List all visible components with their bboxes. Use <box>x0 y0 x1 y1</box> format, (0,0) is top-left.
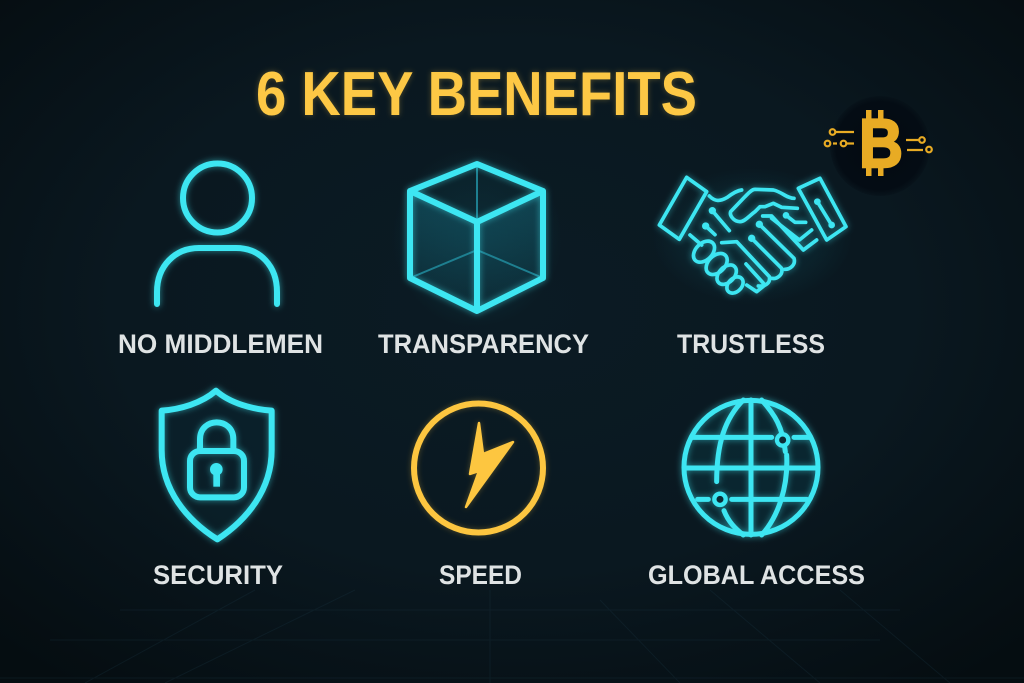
icon: handshake <box>652 168 852 304</box>
icon: bitcoin badge: B <box>859 105 903 182</box>
icon: globe with nodes <box>683 399 819 536</box>
label: no middlemen: NO MIDDLEMEN <box>118 329 323 359</box>
label: trustless: TRUSTLESS <box>677 329 825 359</box>
label: global access: GLOBAL ACCESS <box>648 560 865 590</box>
panel: security <box>153 391 283 590</box>
icon: person <box>157 164 277 304</box>
panel: trustless <box>652 168 852 359</box>
panel: speed <box>414 404 543 590</box>
icon: shield with padlock <box>162 391 272 539</box>
label: security: SECURITY <box>153 560 283 590</box>
title: 6 KEY BENEFITS <box>256 60 697 129</box>
icon: bitcoin badge <box>825 96 932 196</box>
panel: global access <box>648 399 865 590</box>
panel: transparency <box>378 147 589 359</box>
panel: no middlemen <box>118 164 323 359</box>
label: speed: SPEED <box>439 560 522 590</box>
icon: cube <box>392 147 562 327</box>
icon: lightning in circle <box>414 404 543 532</box>
label: transparency: TRANSPARENCY <box>378 329 589 359</box>
